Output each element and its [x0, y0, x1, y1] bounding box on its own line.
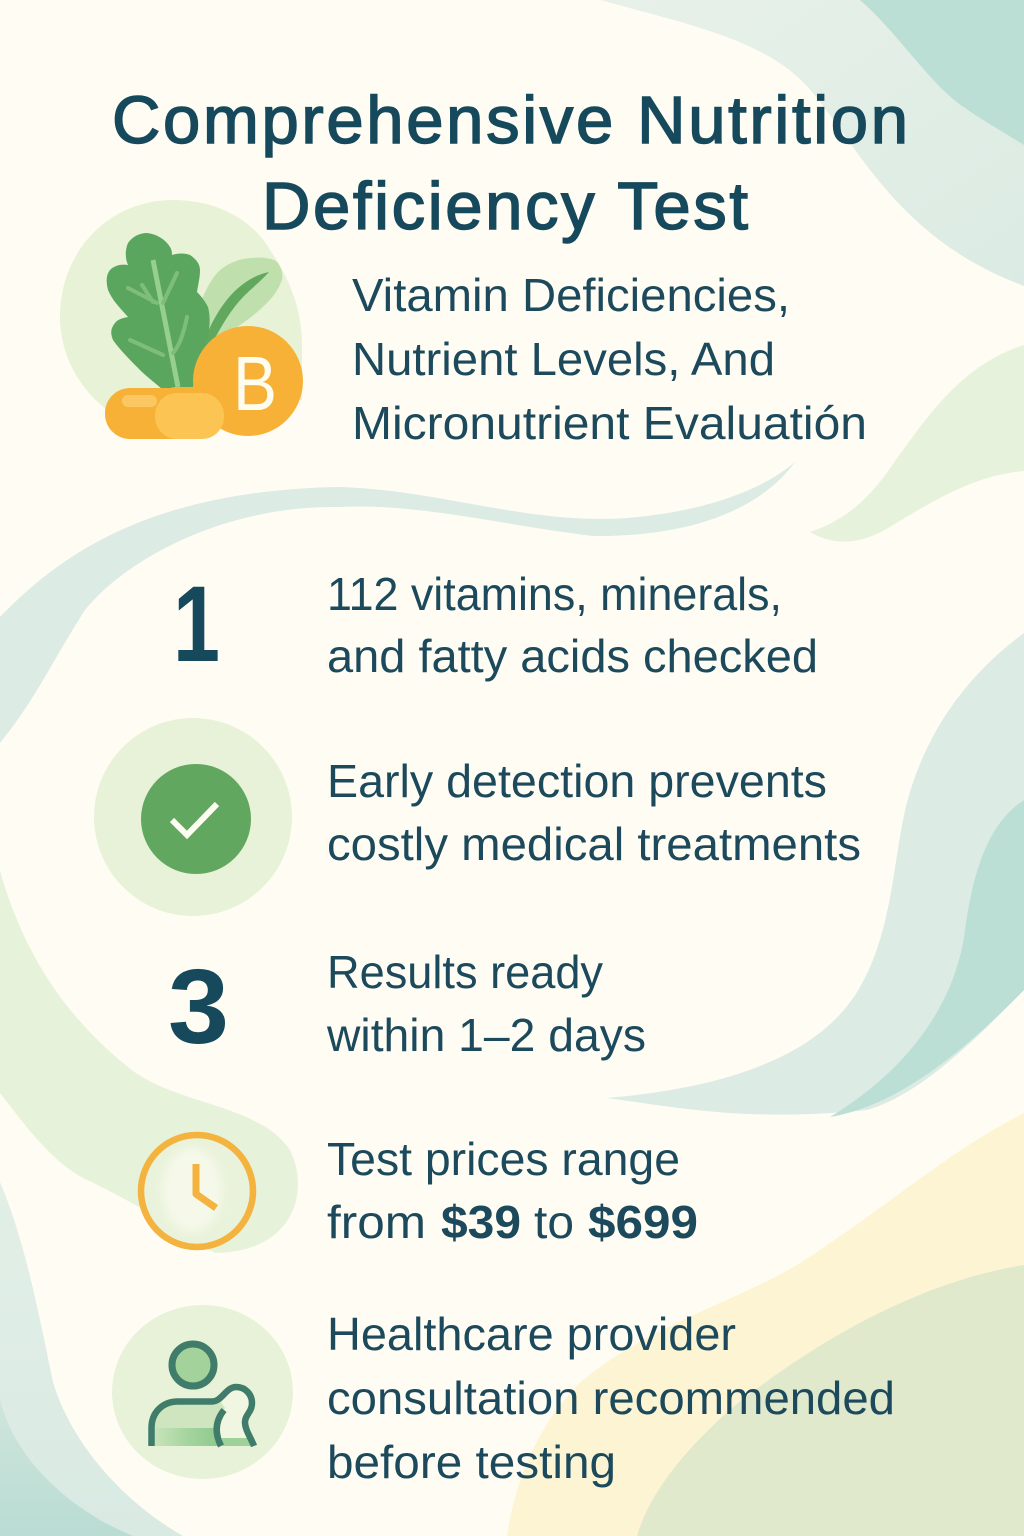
item 4 text: from	[327, 1196, 426, 1248]
subtitle: Micronutrient Evaluatión	[352, 397, 867, 449]
title: Deficiency Test	[262, 169, 748, 244]
background: right teal wave	[607, 633, 1024, 1117]
icon: leaves and vitamin B	[60, 200, 303, 439]
background: middle teal wave	[0, 462, 795, 743]
subtitle: Vitamin Deficiencies,	[352, 269, 790, 321]
item 4 text	[327, 1133, 698, 1248]
item 5 text: before testing	[327, 1436, 616, 1488]
item 4 text: $699	[588, 1196, 698, 1248]
subtitle: Nutrient Levels, And	[352, 333, 775, 385]
icon: clock	[141, 1135, 253, 1247]
vitamin B coin	[193, 326, 303, 436]
icon: leaves and vitamin B: B	[233, 341, 277, 427]
item 3 number: 3	[168, 948, 229, 1066]
subtitle	[352, 269, 867, 449]
background: bottom right yellow wave	[507, 1113, 1024, 1536]
background: top right wave	[600, 0, 1024, 286]
figure body	[151, 1387, 254, 1446]
item 2 text: Early detection prevents	[327, 755, 827, 807]
title: Comprehensive Nutrition	[112, 83, 908, 158]
icon backdrop blob	[60, 200, 302, 410]
title	[112, 83, 908, 244]
background: bottom left teal wave	[0, 1182, 183, 1536]
background: left green wave	[0, 871, 298, 1253]
item 1 text: and fatty acids checked	[327, 630, 818, 682]
item 3 text: within 1–2 days	[326, 1009, 646, 1061]
item 5 text: consultation recommended	[327, 1372, 895, 1424]
item 2 text	[327, 755, 861, 870]
second figure	[217, 1390, 252, 1446]
pale leaf	[195, 258, 282, 387]
item 2 text: costly medical treatments	[327, 818, 861, 870]
item 4 text: Test prices range	[327, 1133, 680, 1185]
item 1 text	[327, 568, 818, 682]
background: right green wave	[810, 345, 1024, 542]
item 1 number: 1	[173, 563, 220, 684]
dark leaf	[107, 233, 210, 392]
item 3 text: Results ready	[327, 946, 603, 998]
icon: check mark	[94, 718, 292, 916]
item 4 text: to	[534, 1196, 574, 1248]
item 3 text	[326, 946, 646, 1061]
figure head	[172, 1344, 214, 1386]
icon: healthcare provider	[112, 1305, 293, 1479]
item 5 text: Healthcare provider	[327, 1308, 736, 1360]
item 1 text: 112 vitamins, minerals,	[327, 568, 782, 620]
capsule	[105, 388, 215, 439]
item 4 text: $39	[441, 1196, 521, 1248]
item 5 text	[327, 1308, 895, 1488]
